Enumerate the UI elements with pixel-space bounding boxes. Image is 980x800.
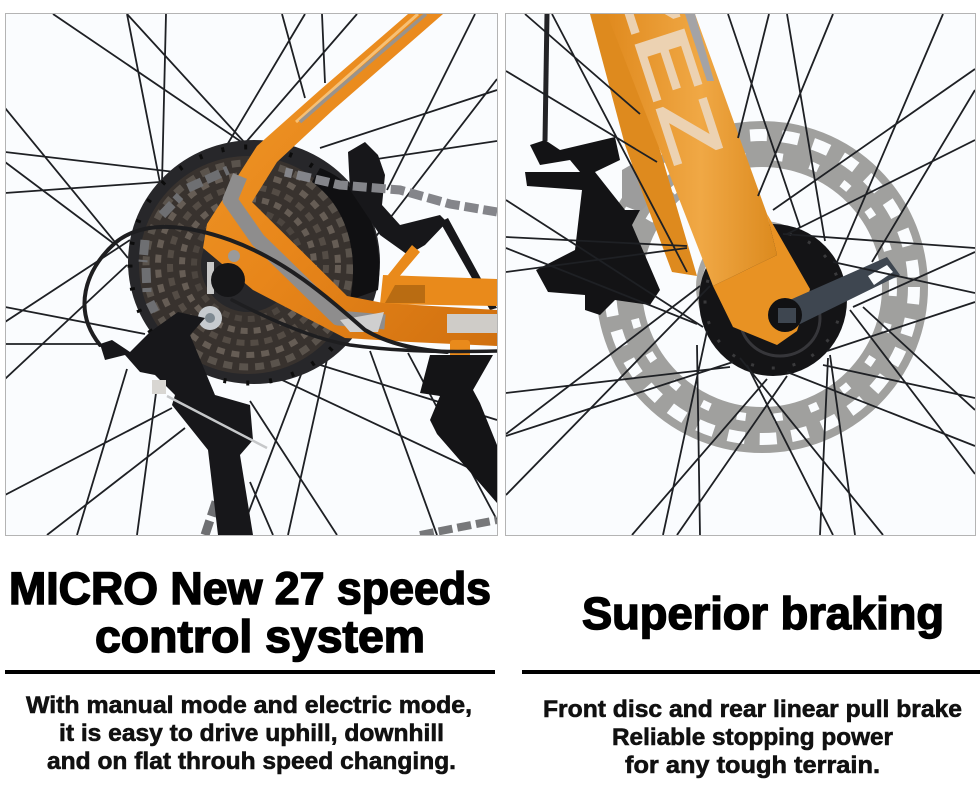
- rear fork blade: [590, 14, 697, 276]
- heading: braking: Superior braking: [582, 588, 944, 639]
- fork stripe: [685, 14, 714, 81]
- text block: gear description: With manual mode and electric mode,: [26, 692, 472, 719]
- quick release lever: [768, 257, 900, 332]
- panel: front brake photo: [505, 0, 975, 535]
- panel: rear gear photo: [5, 13, 497, 535]
- panel border: rear gear: [6, 14, 498, 536]
- chain: [143, 170, 497, 535]
- text block: gear description: and on flat throuh speed changing.: [47, 748, 456, 775]
- rear orange frame: [203, 14, 497, 360]
- panel border: front brake: [506, 14, 976, 536]
- brake cable: [545, 14, 547, 141]
- text block: brake description: [543, 696, 962, 779]
- divider: right column: [522, 670, 980, 674]
- hub: [699, 224, 847, 376]
- rear wheel spokes: [5, 14, 497, 535]
- kickstand bracket: [420, 355, 497, 503]
- seat-stay knob: [198, 250, 245, 330]
- text block: brake description: for any tough terrain.: [625, 752, 880, 779]
- divider: left column: [5, 670, 495, 674]
- rear brake and black hub parts: [312, 142, 497, 310]
- rear derailleur: [100, 312, 267, 535]
- front wheel spokes: [506, 14, 975, 535]
- fork dropout: [713, 214, 810, 345]
- text block: gear description: it is easy to drive uphill, downhill: [59, 720, 444, 747]
- caliper: [525, 137, 660, 315]
- heading: gear system: [9, 563, 491, 662]
- freewheel disc: [128, 140, 380, 384]
- shift cables: [85, 227, 497, 352]
- text block: gear description: [26, 692, 472, 775]
- text block: brake description: Reliable stopping power: [612, 724, 893, 751]
- disc rotor: [610, 135, 914, 439]
- orange fork leg: [607, 14, 777, 286]
- rotor adapter plate: [622, 164, 644, 210]
- heading: gear system: control system: [95, 611, 425, 662]
- text block: brake description: Front disc and rear linear pull brake: [543, 696, 962, 723]
- gear cassette: [130, 147, 366, 383]
- heading: gear system: MICRO New 27 speeds: [9, 563, 491, 614]
